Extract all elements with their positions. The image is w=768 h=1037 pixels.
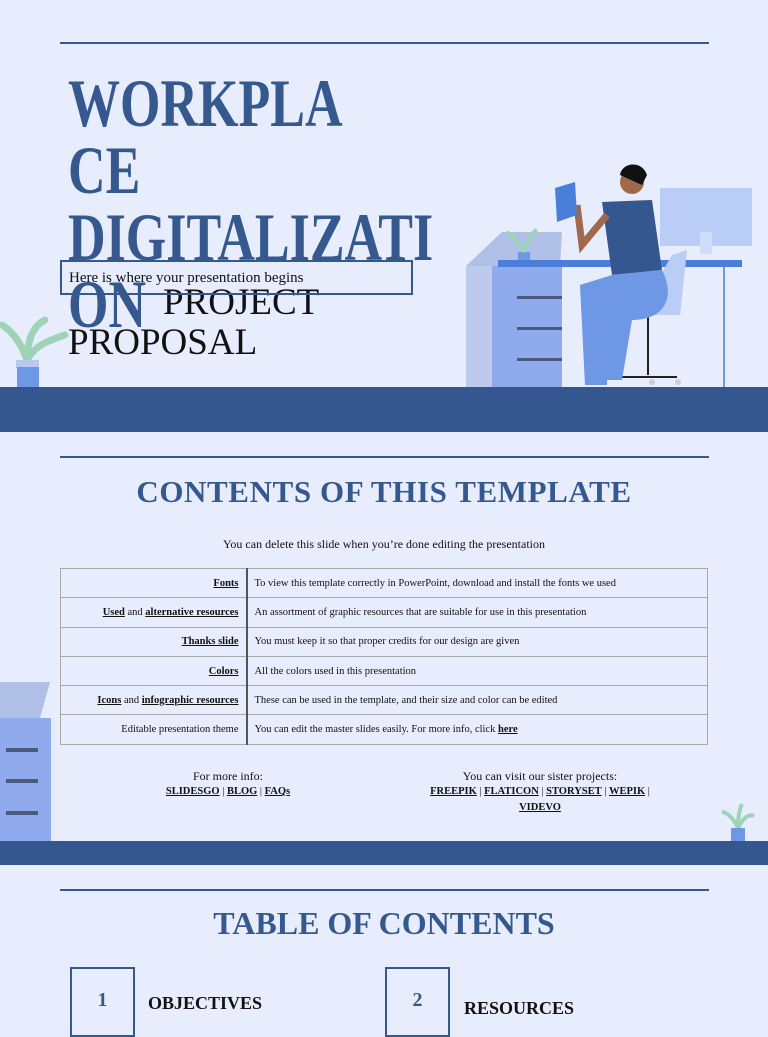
table: resources: You must keep it so that proper credits for our design are given	[254, 636, 519, 647]
text: more info	[166, 769, 290, 797]
table: resources: To view this template correctly in PowerPoint, download and install the fonts we used	[254, 578, 616, 589]
text: more info: SLIDESGO | BLOG | FAQs	[166, 786, 290, 797]
illustration: desk worker	[466, 164, 752, 387]
icon: plant right	[722, 803, 755, 841]
table: resources: You can edit the master slides easily. For more info, click here	[254, 724, 518, 735]
table: resources: These can be used in the template, and their size and color can be edited	[254, 695, 557, 706]
title: ON	[68, 266, 146, 342]
text: sister projects: FREEPIK | FLATICON | STORYSET | WEPIK |	[430, 786, 650, 797]
table: resources: Fonts	[213, 578, 238, 589]
table: resources: Colors	[209, 666, 238, 677]
text: sister projects	[430, 769, 650, 813]
item 2: 2	[412, 989, 422, 1011]
table: resources: Icons and infographic resources	[97, 695, 238, 706]
table: resources	[60, 568, 708, 745]
item 2	[385, 967, 574, 1037]
icon: plant left	[0, 316, 68, 387]
table: resources: Thanks slide	[182, 636, 238, 647]
table: resources: Editable presentation theme	[121, 724, 238, 735]
table: resources: Used and alternative resources	[103, 607, 238, 618]
subtitle box: Here is where your presentation begins	[69, 270, 304, 286]
subtitle word project: PROJECT	[163, 282, 319, 323]
title: WORKPLA	[68, 65, 343, 141]
title: CE	[68, 132, 140, 208]
text: sister projects: VIDEVO	[519, 802, 561, 813]
subtitle word: PROPOSAL	[68, 322, 257, 363]
table: resources: All the colors used in this presentation	[254, 666, 416, 677]
heading: table of contents: TABLE OF CONTENTS	[213, 905, 555, 941]
subtitle box	[60, 260, 413, 295]
title	[68, 65, 433, 342]
text: delete note: You can delete this slide when you’re done editing the presentation	[223, 537, 545, 551]
table: resources: An assortment of graphic resources that are suitable for use in this presentation	[254, 607, 586, 618]
item 2: RESOURCES	[464, 998, 574, 1018]
item 1: 1	[98, 989, 108, 1011]
item 1: OBJECTIVES	[148, 993, 262, 1013]
text: more info: For more info:	[193, 769, 263, 783]
item 1	[70, 967, 262, 1037]
icon: cabinet left	[0, 682, 51, 841]
heading: contents: CONTENTS OF THIS TEMPLATE	[136, 474, 632, 509]
title: DIGITALIZATI	[68, 199, 433, 275]
text: sister projects: You can visit our sister projects:	[463, 769, 617, 783]
